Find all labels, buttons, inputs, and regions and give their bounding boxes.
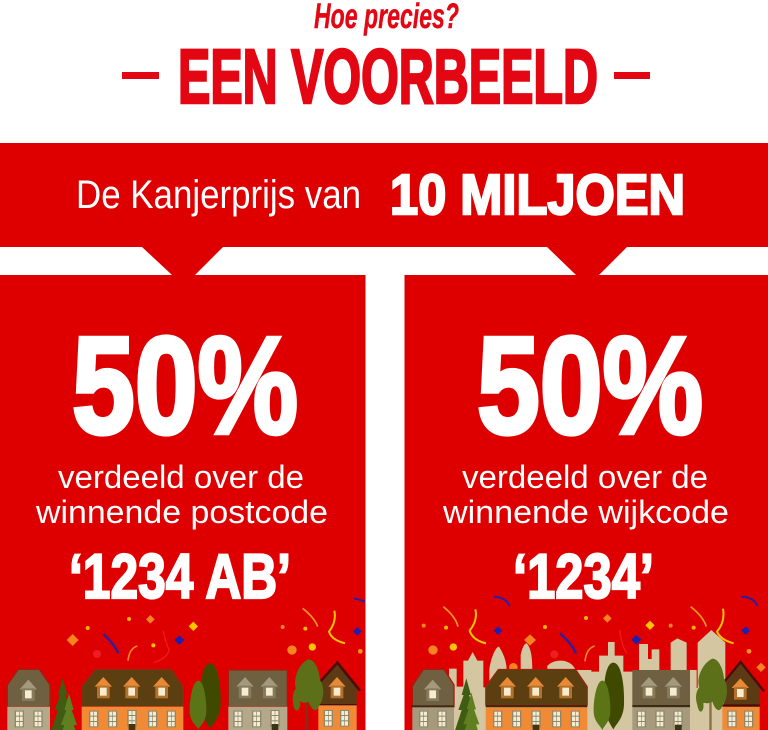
percentage: wijkcode: 50% xyxy=(477,309,703,463)
description: postcode: verdeeld over de xyxy=(58,459,304,495)
leafy tree xyxy=(696,659,727,730)
pine trees xyxy=(49,678,82,730)
skyline xyxy=(449,630,725,730)
leafy tree xyxy=(293,659,323,730)
percentage: postcode: 50% xyxy=(72,309,298,463)
code: wijkcode: ‘1234’ xyxy=(513,542,654,612)
house 2 xyxy=(486,669,587,730)
confetti xyxy=(422,597,766,672)
illustration: confetti, skyline and houses xyxy=(411,597,768,730)
panel: postcode xyxy=(0,275,366,730)
description: wijkcode xyxy=(442,459,729,530)
house 3 xyxy=(632,670,690,730)
house 3 xyxy=(228,670,287,730)
cypress trees xyxy=(594,663,624,730)
code: postcode: ‘1234 AB’ xyxy=(69,542,291,612)
description: postcode: winnende postcode xyxy=(35,494,328,530)
house 2 xyxy=(82,669,183,730)
description: postcode xyxy=(35,459,328,530)
house 1 xyxy=(7,669,50,730)
panel: wijkcode xyxy=(404,275,768,730)
banner: prize: De Kanjerprijs van xyxy=(76,173,361,217)
illustration: confetti and houses xyxy=(7,598,365,730)
house 4 xyxy=(722,662,768,730)
cypress trees xyxy=(190,663,221,729)
confetti xyxy=(67,598,365,663)
banner: prize: 10 MILJOEN xyxy=(390,163,685,227)
banner: prize xyxy=(0,143,768,275)
description: wijkcode: winnende wijkcode xyxy=(442,494,729,530)
house 4 xyxy=(318,663,360,730)
pine trees xyxy=(453,678,485,730)
house 1 xyxy=(411,669,454,730)
description: wijkcode: verdeeld over de xyxy=(462,459,708,495)
